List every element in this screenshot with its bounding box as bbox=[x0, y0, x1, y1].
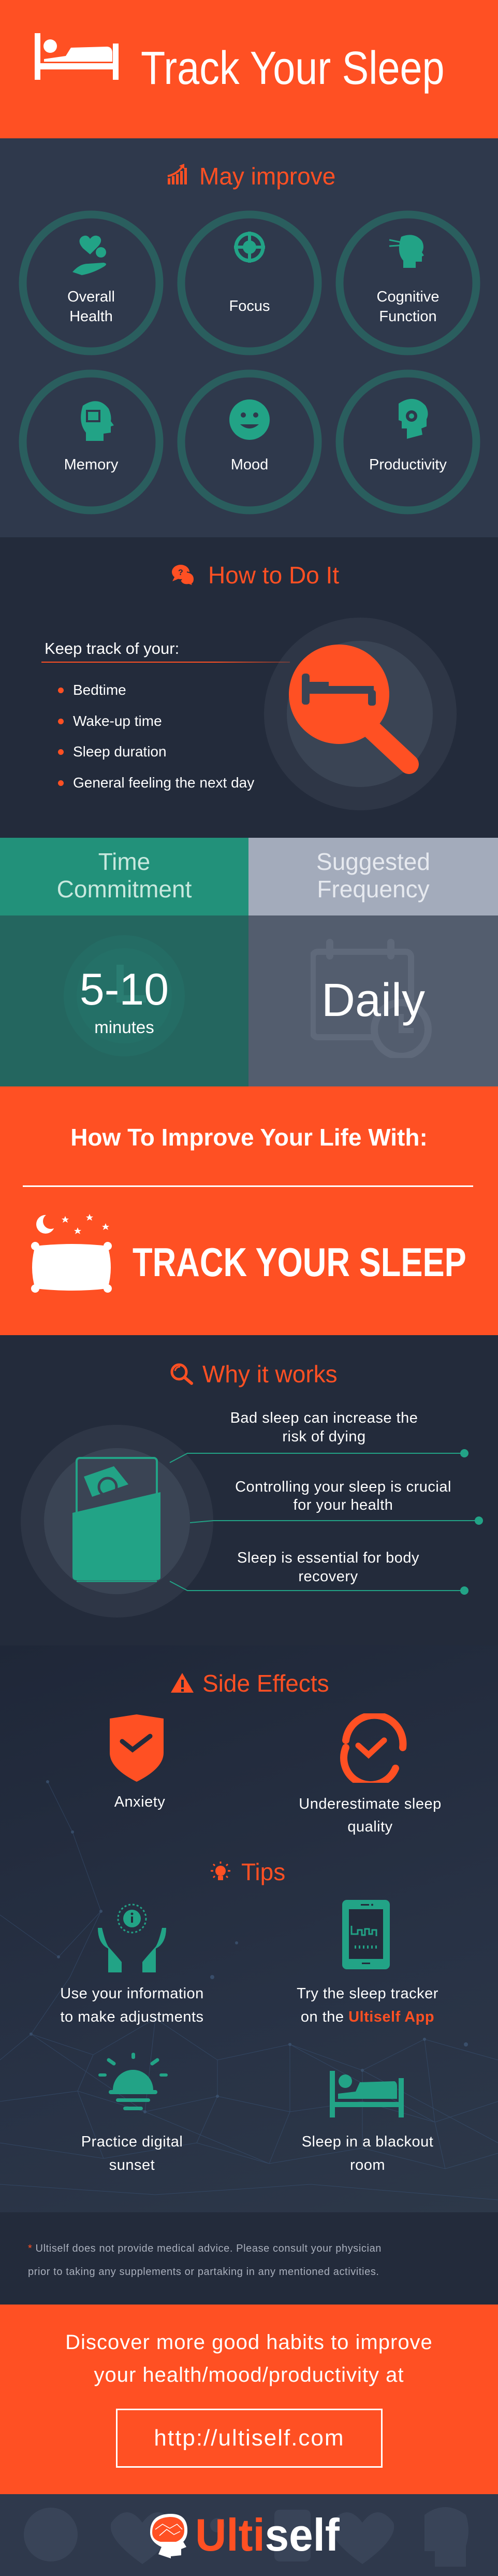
icon: target bbox=[236, 234, 263, 261]
panel: why it works bbox=[0, 1335, 498, 1645]
circle labels: Mood bbox=[231, 456, 268, 473]
tip: use your information: Use your information bbox=[60, 1985, 204, 2002]
heading: suggested frequency bbox=[316, 848, 430, 903]
tip: digital sunset bbox=[81, 2053, 183, 2173]
tip: blackout room: room bbox=[350, 2157, 385, 2173]
panel: why it works: recovery bbox=[298, 1568, 358, 1585]
connector lines bbox=[170, 1449, 483, 1595]
heading: time commitment: Time bbox=[98, 848, 150, 875]
network pattern bbox=[0, 1780, 498, 2200]
logo text: Ultiself bbox=[195, 2509, 340, 2560]
icon: clock bbox=[77, 948, 172, 1043]
footer: logo bbox=[0, 2494, 498, 2576]
heading: suggested frequency: Frequency bbox=[317, 876, 430, 903]
heading: why it works: Why it works bbox=[202, 1361, 338, 1387]
value: 5-10 minutes: 5-10 bbox=[80, 965, 169, 1014]
heading: time commitment: Commitment bbox=[57, 876, 192, 903]
tip: digital sunset: sunset bbox=[109, 2157, 155, 2173]
circle labels: Function bbox=[379, 308, 437, 325]
tip: blackout room bbox=[302, 2071, 433, 2173]
icon: brain head logo bbox=[150, 2514, 187, 2558]
tip: blackout room: Sleep in a blackout bbox=[302, 2134, 433, 2150]
tip: sleep tracker app bbox=[297, 1900, 438, 2025]
panel: why it works: Sleep is essential for body bbox=[237, 1550, 419, 1566]
circle labels: Cognitive bbox=[377, 289, 439, 305]
panel: how to do it bbox=[0, 537, 498, 838]
banner: how to improve bbox=[0, 1086, 498, 1335]
panel: call to action bbox=[0, 2305, 498, 2494]
heading: time commitment bbox=[57, 848, 192, 903]
panel: time commitment bbox=[0, 838, 248, 1086]
heading: how to do it: How to Do It bbox=[208, 562, 339, 589]
text: discover more: your health/mood/productivity at bbox=[94, 2364, 404, 2386]
panel: time commitment: minutes bbox=[94, 1018, 154, 1037]
panel: why it works: for your health bbox=[294, 1497, 393, 1513]
title: track your sleep: TRACK YOUR SLEEP bbox=[133, 1239, 466, 1285]
panel: suggested frequency bbox=[248, 838, 498, 1086]
circle labels: Health bbox=[69, 308, 113, 325]
heading: may improve: May improve bbox=[199, 163, 335, 190]
disclaimer bbox=[28, 2243, 382, 2278]
tip: use your information bbox=[60, 1904, 204, 2025]
side effect: underestimate sleep quality: quality bbox=[347, 1819, 393, 1835]
text: keep track list: General feeling the next day bbox=[73, 775, 254, 791]
heading: how to improve: How To Improve Your Life With: bbox=[70, 1124, 428, 1151]
header banner bbox=[0, 0, 498, 138]
tip: sleep tracker app: on the Ultiself App bbox=[301, 2009, 434, 2025]
heading: side effects: Side Effects bbox=[202, 1670, 329, 1697]
icon: calendar bbox=[311, 939, 432, 1058]
disclaimer: prior to taking any supplements or partaking in any mentioned activities. bbox=[28, 2266, 379, 2278]
heading: suggested frequency: Suggested bbox=[316, 848, 430, 875]
icon: pillow with moon bbox=[31, 1214, 112, 1293]
icon: smiley bbox=[229, 399, 270, 440]
button: url: http://ultiself.com bbox=[154, 2425, 345, 2451]
icon: bed bbox=[35, 33, 119, 80]
text: discover more: Discover more good habits to improve bbox=[65, 2331, 433, 2354]
tip: sleep tracker app: Try the sleep tracker bbox=[297, 1985, 438, 2002]
text: keep track list: Sleep duration bbox=[73, 743, 167, 760]
disclaimer: * Ultiself does not provide medical advice. Please consult your physician bbox=[28, 2243, 382, 2254]
value: daily: Daily bbox=[321, 975, 425, 1026]
text: keep track list: Bedtime bbox=[73, 682, 126, 698]
panel: why it works: Controlling your sleep is crucial bbox=[235, 1479, 451, 1495]
faded background icons bbox=[24, 2507, 468, 2567]
text: keep track list: Wake-up time bbox=[73, 713, 162, 729]
text: keep track list: Keep track of your: bbox=[45, 639, 179, 657]
text: reasons: Bad sleep can increase the bbox=[230, 1410, 418, 1426]
circle labels: Overall bbox=[67, 289, 115, 305]
side effect: anxiety bbox=[110, 1714, 165, 1810]
heading: tips: Tips bbox=[241, 1858, 285, 1885]
text: reasons bbox=[230, 1410, 418, 1445]
circle labels: Focus bbox=[229, 298, 270, 314]
text: reasons: risk of dying bbox=[282, 1428, 366, 1445]
panel: may improve bbox=[0, 138, 498, 537]
heading: tips bbox=[211, 1858, 285, 1885]
tip: use your information: to make adjustments bbox=[60, 2009, 204, 2025]
tip: digital sunset: Practice digital bbox=[81, 2134, 183, 2150]
heading: how to do it: ? bbox=[178, 568, 183, 577]
circle labels bbox=[64, 289, 447, 473]
button: url bbox=[116, 2409, 383, 2468]
icon: heart hand bbox=[79, 236, 101, 254]
text: discover more bbox=[65, 2331, 433, 2386]
icon: memory head bbox=[81, 401, 114, 441]
text: keep track list bbox=[41, 639, 290, 791]
icon: cognitive head bbox=[399, 235, 424, 268]
side effect: underestimate sleep quality bbox=[299, 1713, 442, 1835]
circle labels: Productivity bbox=[369, 456, 447, 473]
illustration: sleeping in bed bbox=[21, 1425, 213, 1618]
circles grid bbox=[19, 210, 480, 514]
magnifier illustration bbox=[264, 618, 457, 810]
side effect: anxiety: Anxiety bbox=[114, 1794, 165, 1810]
side effect: underestimate sleep quality: Underestimate sleep bbox=[299, 1796, 442, 1812]
panel: side effects and tips (network background) bbox=[0, 1645, 498, 2212]
icon: productivity head bbox=[399, 399, 428, 439]
title: Track Your Sleep bbox=[141, 42, 445, 94]
circle labels: Memory bbox=[64, 456, 119, 473]
